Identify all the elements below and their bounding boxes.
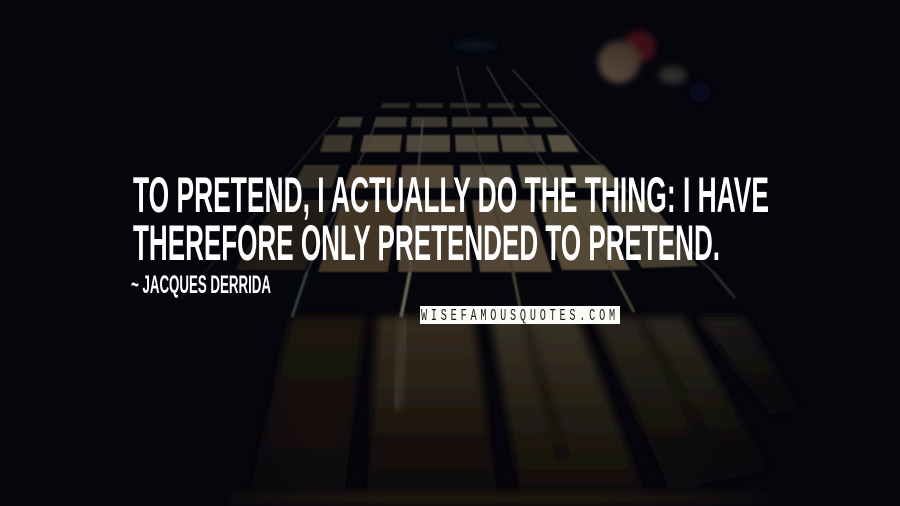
lens flare [451,30,710,102]
pale string over the frets [396,317,405,410]
fret rows [235,103,698,272]
strings [205,67,713,272]
large frets in foreground [230,312,800,506]
lower string segments [180,272,735,317]
quote text [133,167,769,271]
attribution: ~ JACQUES DERRIDA [131,271,271,299]
watermark: WISEFAMOUSQUOTES.COM [421,307,619,326]
